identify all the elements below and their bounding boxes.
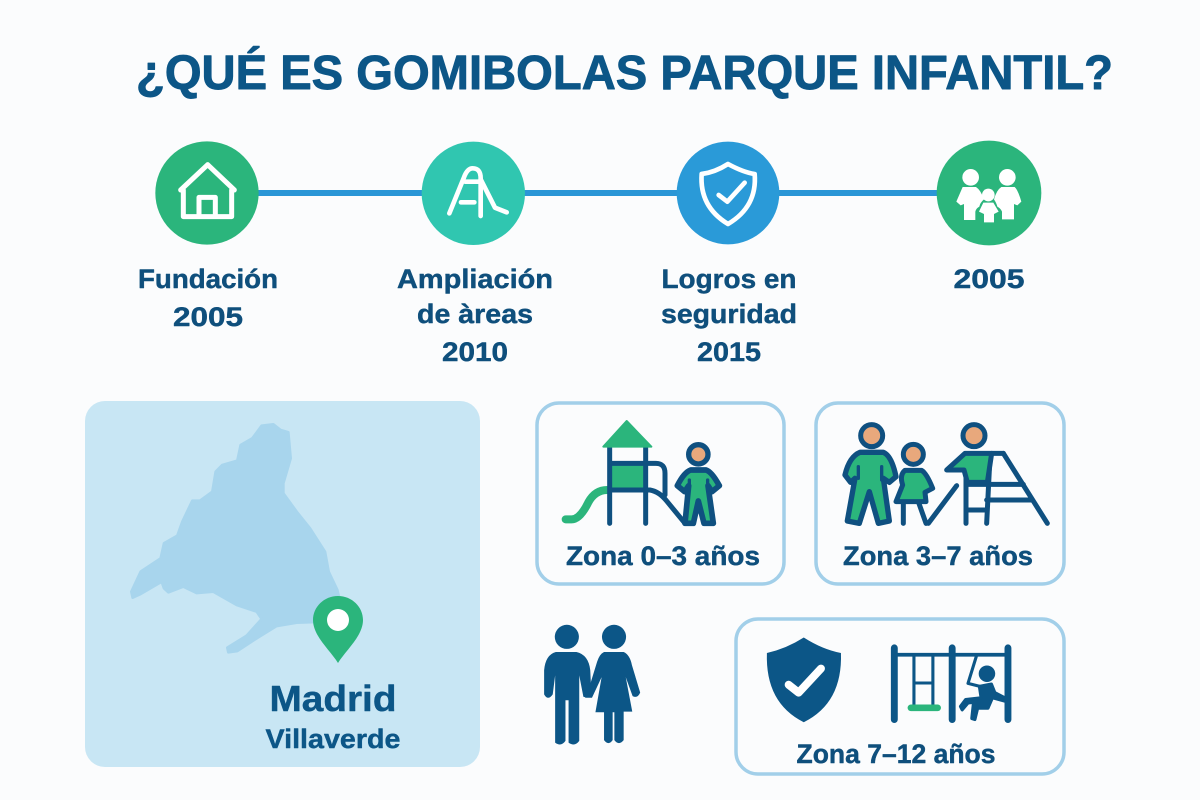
icon: house [155, 141, 259, 245]
icon: safety shield [767, 638, 841, 722]
label: Fundación 2005: 2005 [173, 302, 243, 332]
label: Logros en seguridad 2015: seguridad [661, 299, 797, 329]
card frame [816, 403, 1064, 584]
panel: Zona 0-3 años [537, 403, 784, 584]
label: Zona 7-12 años: Zona 7–12 años [796, 739, 996, 769]
label: Logros en seguridad 2015: Logros en [662, 264, 796, 294]
map background [85, 401, 480, 767]
icon: slide [422, 142, 525, 245]
label: Logros en seguridad 2015: 2015 [697, 337, 761, 367]
card frame [736, 619, 1064, 774]
icon: shield check [677, 142, 779, 244]
icon: play tower and child [566, 421, 719, 523]
label: Zona 0-3 años: Zona 0–3 años [566, 541, 760, 571]
label: Madrid: Madrid [270, 678, 396, 719]
title: ¿QUÉ ES GOMIBOLAS PARQUE INFANTIL? [136, 46, 1113, 100]
icon: swing set and child [894, 648, 1008, 720]
timeline connector line [255, 190, 945, 196]
icon: location pin [313, 596, 363, 663]
timeline [138, 141, 1041, 367]
map: Comunidad de Madrid silhouette [131, 424, 342, 652]
label: Ampliación de àreas 2010: Ampliación [397, 264, 553, 294]
label: Fundación 2005: Fundación [138, 264, 278, 294]
icon: family [937, 141, 1041, 245]
icon: couple holding hands [544, 625, 640, 744]
milestone: 2005 family [937, 141, 1041, 294]
panel: Zona 3-7 años [816, 403, 1064, 584]
label: Zona 3-7 años: Zona 3–7 años [843, 541, 1033, 571]
label: Ampliación de àreas 2010: de àreas [417, 299, 533, 329]
label: Villaverde: Villaverde [266, 724, 400, 754]
milestone: Ampliación de áreas 2010 [397, 142, 553, 367]
panel: Zona 7-12 años [736, 619, 1064, 774]
milestone: Fundación 2005 [138, 141, 278, 332]
label: Ampliación de àreas 2010: 2010 [442, 337, 508, 367]
panel: map of Madrid [85, 401, 480, 767]
card frame [537, 403, 784, 584]
milestone: Logros en seguridad 2015 [661, 142, 797, 367]
label: 2005: 2005 [954, 264, 1024, 294]
icon: adult, child and climbing frame [845, 425, 1047, 523]
